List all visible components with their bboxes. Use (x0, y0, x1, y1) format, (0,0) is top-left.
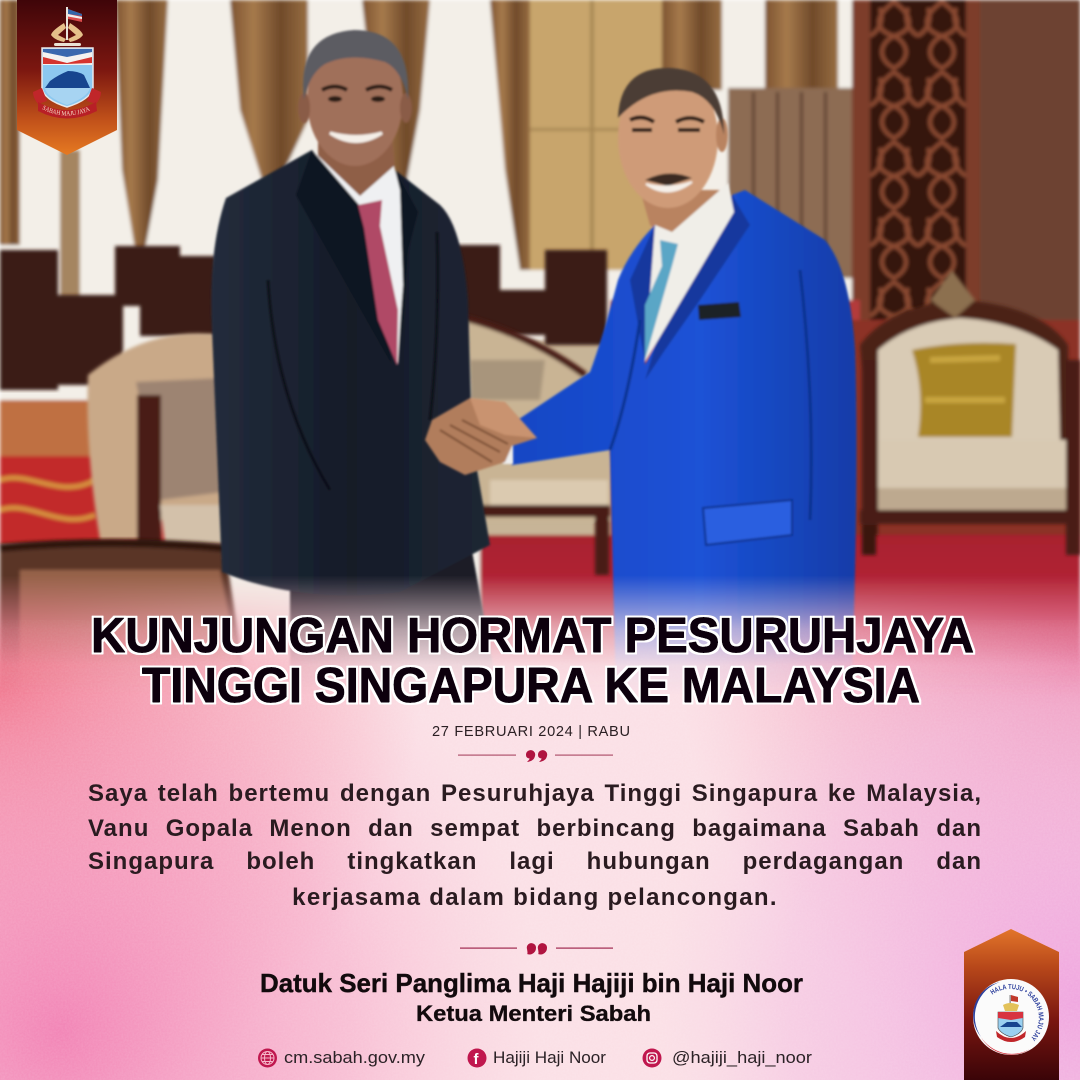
trousers (290, 540, 510, 760)
crest arms (51, 23, 83, 42)
armchair: right (860, 270, 1080, 555)
divider: closing quote (460, 943, 613, 954)
title: TINGGI SINGAPURA KE MALAYSIA (142, 659, 920, 713)
white shirt (645, 183, 734, 362)
name (260, 968, 803, 1026)
pink necktie (358, 200, 398, 365)
man: left figure in dark suit (211, 30, 510, 760)
title: KUNJUNGAN HORMAT PESURUHJAYA (91, 609, 974, 663)
name badge (698, 302, 741, 320)
glass table reflection (0, 542, 260, 780)
soft pink gradient overlay (0, 560, 1080, 1080)
background dark chairs (0, 245, 607, 390)
blue suit jacket (510, 190, 856, 780)
hair (618, 68, 724, 135)
name: Datuk Seri Panglima Haji Hajiji bin Haji Noor (260, 968, 803, 998)
statement paragraph: Vanu Gopala Menon dan sempat berbincang bagaimana Sabah dan (88, 815, 982, 842)
dark suit jacket (211, 150, 490, 595)
neck (318, 130, 396, 210)
ribbon: Sabah crest top left (17, 0, 117, 155)
hair (303, 30, 408, 100)
facebook: Hajiji Haji Noor (493, 1048, 606, 1067)
armchair: left (88, 318, 610, 575)
instagram: @hajiji_haji_noor (672, 1048, 812, 1067)
man: right figure in blue suit (510, 68, 856, 780)
statement paragraph: Saya telah bertemu dengan Pesuruhjaya Tinggi Singapura ke Malaysia, (88, 780, 982, 807)
facial features (630, 117, 704, 122)
statement paragraph: Singapura boleh tingkatkan lagi hubungan perdagangan dan (88, 848, 982, 875)
jacket pocket flap (703, 500, 792, 545)
shield (42, 48, 93, 107)
date: 27 FEBRUARI 2024 | RABU (432, 724, 631, 740)
role: Ketua Menteri Sabah (416, 1001, 651, 1026)
light blue necktie (645, 240, 678, 360)
face (618, 68, 718, 208)
facebook: f (474, 1051, 480, 1068)
social links (258, 1048, 812, 1068)
face (307, 34, 403, 166)
white shirt (312, 150, 403, 365)
divider: opening quote (458, 750, 613, 762)
statement paragraph: kerjasama dalam bidang pelancongan. (292, 884, 778, 911)
left shirt cuff (503, 428, 513, 464)
website: cm.sabah.gov.my (284, 1048, 426, 1067)
room background (0, 0, 1080, 780)
flag (66, 7, 82, 40)
motto banner: SABAH MAJU JAYA (42, 106, 90, 116)
facial features (322, 86, 392, 90)
handshake (425, 398, 537, 475)
neck (640, 190, 732, 240)
motto banner (33, 88, 101, 118)
ribbon: emblem bottom right (964, 929, 1059, 1080)
